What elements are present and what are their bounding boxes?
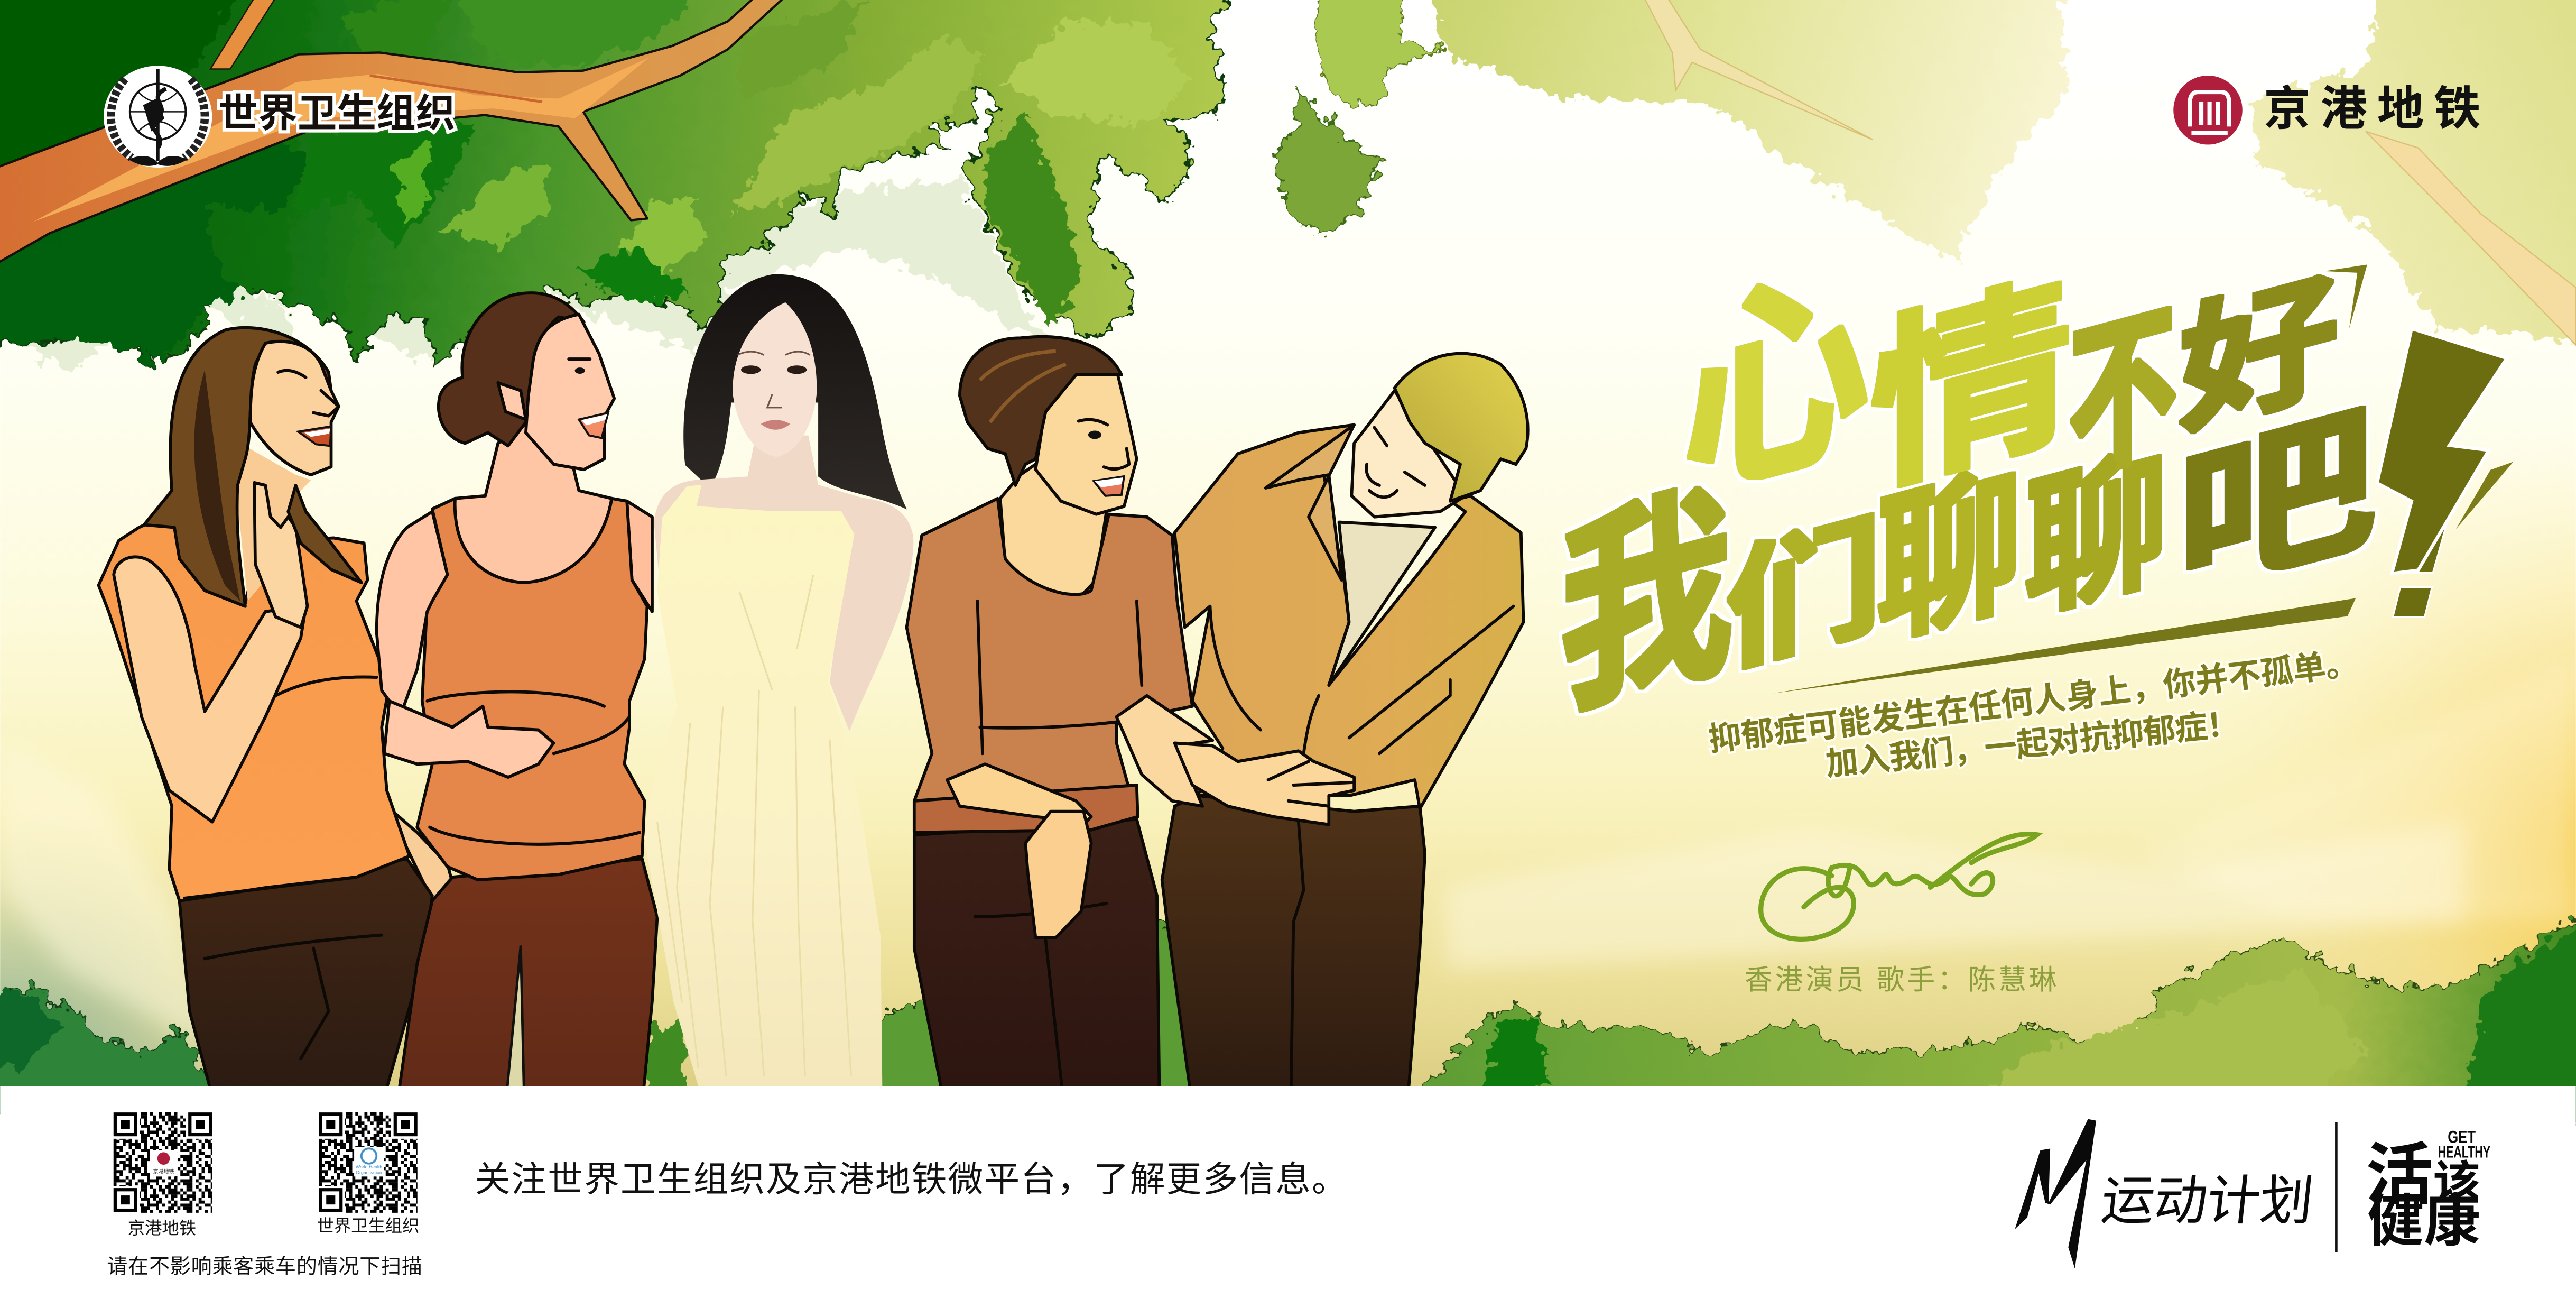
headline characters: 吧	[2175, 385, 2377, 620]
face	[733, 302, 817, 457]
footer strip	[0, 1086, 2576, 1308]
face	[526, 315, 614, 469]
follow message: 关注世界卫生组织及京港地铁微平台，了解更多信息。	[475, 1160, 1347, 1199]
light foliage patches	[394, 140, 431, 222]
left arm	[377, 512, 448, 712]
slogan: 抑郁症可能发生在任何人身上，你并不孤单。	[1707, 644, 2360, 758]
shirt	[1329, 522, 1435, 685]
signature caption: 香港演员 歌手：陈慧琳	[1745, 964, 2057, 996]
QR code: metro	[112, 1111, 214, 1214]
hair	[144, 328, 331, 606]
M brush logo	[2015, 1119, 2096, 1268]
hair	[960, 337, 1122, 485]
headline characters: 情	[1869, 257, 2073, 517]
headline characters	[1559, 241, 2377, 743]
skin arms and chest	[654, 436, 913, 731]
get healthy logo	[2366, 1127, 2490, 1253]
hair	[439, 293, 584, 446]
headline	[1559, 241, 2514, 743]
mouth	[579, 413, 608, 438]
dress creases	[657, 575, 851, 1076]
shirt	[98, 512, 410, 901]
tree canopy left	[0, 0, 1226, 365]
hands	[1116, 696, 1212, 806]
QR code: WHO: Organization	[356, 1170, 382, 1175]
metro name: 京港地铁	[2264, 82, 2480, 135]
jacket folds	[1210, 606, 1261, 730]
top	[906, 499, 1192, 833]
headline underline wedge	[1773, 598, 2356, 694]
shirt fold	[275, 677, 377, 696]
chest	[455, 422, 611, 583]
pants	[397, 859, 657, 1106]
scan notice: 请在不影响乘客乘车的情况下扫描	[107, 1256, 422, 1278]
get healthy logo: HEALTHY	[2438, 1143, 2490, 1162]
get healthy logo: 该	[2433, 1158, 2480, 1206]
logo divider	[2335, 1122, 2338, 1252]
eye right	[787, 365, 807, 374]
QR caption: WHO: 世界卫生组织	[317, 1216, 419, 1235]
tank top	[417, 499, 647, 880]
metro symbol	[2173, 76, 2243, 145]
eyes	[741, 365, 761, 374]
jacket	[1175, 425, 1524, 809]
headline characters: 不	[2068, 286, 2176, 502]
raised arm	[114, 557, 306, 822]
QR code: WHO	[317, 1111, 419, 1214]
person: singer in cream dress	[644, 274, 913, 1086]
branch: main orange branch	[0, 0, 790, 266]
signature	[1761, 834, 2037, 939]
QR code: WHO: World Health	[356, 1164, 382, 1169]
tank folds	[427, 692, 604, 706]
logo: MTR Beijing	[2173, 76, 2480, 145]
exercise plan text: 运动计划	[2098, 1171, 2316, 1231]
neck	[238, 443, 311, 601]
QR caption: metro: 京港地铁	[128, 1219, 196, 1238]
exclamation lightning bolt: !	[2362, 423, 2493, 661]
logo: World Health Organization	[104, 66, 455, 168]
branch: pale branches right	[1643, 0, 2576, 345]
lips	[761, 420, 790, 430]
headline characters: 心	[1682, 241, 1869, 529]
right arm	[627, 501, 652, 612]
get healthy logo: 活	[2366, 1138, 2433, 1213]
headline characters: 好	[2179, 256, 2339, 454]
pants	[180, 859, 432, 1106]
person: woman in brown top	[906, 337, 1192, 1106]
ear	[498, 383, 526, 420]
top folds	[980, 722, 1116, 728]
back hair	[683, 274, 907, 509]
person: man in tan jacket	[1116, 354, 1528, 1106]
hand	[1025, 812, 1091, 938]
pale foliage shadow behind canopy	[0, 181, 1051, 370]
mouth	[298, 427, 331, 446]
bushes bottom	[0, 896, 2576, 1117]
chest	[1000, 464, 1106, 596]
headline characters: 聊	[1876, 446, 2022, 666]
hair	[1395, 354, 1528, 501]
headline characters: 们	[1725, 500, 1883, 689]
dress	[644, 485, 882, 1086]
face	[1351, 391, 1466, 517]
WHO name: 世界卫生组织	[219, 90, 455, 135]
person: woman in orange tank top	[377, 293, 657, 1106]
back hand	[387, 806, 460, 959]
face	[250, 342, 339, 475]
get healthy logo: 健康	[2367, 1190, 2480, 1253]
person: laughing woman left	[98, 328, 460, 1106]
lapel	[1266, 425, 1354, 580]
brows and nose	[738, 352, 810, 408]
headline characters: 聊	[2024, 431, 2169, 639]
pants	[1162, 796, 1425, 1106]
get healthy logo: GET	[2448, 1127, 2476, 1147]
headline characters: 我	[1559, 461, 1733, 743]
mouth	[1094, 476, 1124, 496]
face	[1035, 370, 1137, 514]
WHO emblem	[104, 66, 212, 168]
sweater hem	[914, 785, 1138, 833]
raised hand	[254, 483, 308, 628]
pale tree top centre	[1275, 0, 2576, 345]
slogan: 加入我们，一起对抗抑郁症！	[1824, 705, 2241, 783]
QR code: metro: 京港地铁	[153, 1168, 174, 1175]
forearm and hand	[384, 701, 553, 777]
pants	[914, 819, 1160, 1106]
forearm	[947, 764, 1091, 822]
exclamation lightning bolt	[2324, 264, 2514, 661]
dark foliage on the left	[0, 123, 312, 365]
hair strands right	[288, 485, 362, 583]
